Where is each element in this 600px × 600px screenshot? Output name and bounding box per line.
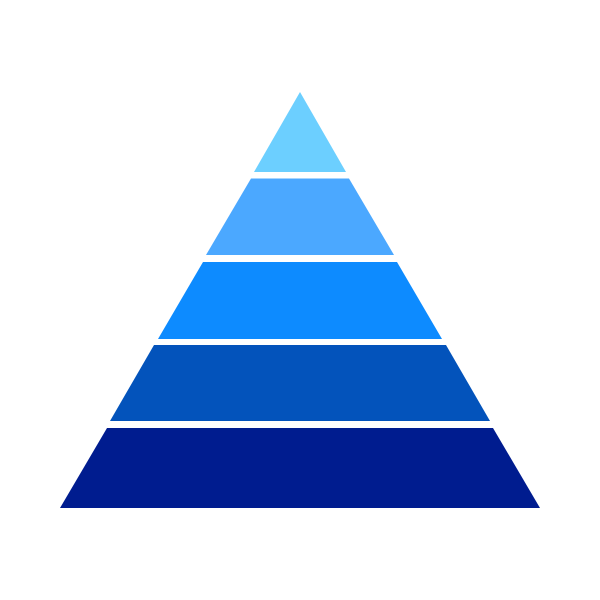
pyramid tier 4: [110, 345, 490, 421]
pyramid tier 1 (top): [254, 92, 346, 172]
pyramid tier 5 (base): [60, 428, 540, 508]
pyramid tier 2: [206, 178, 394, 255]
pyramid tier 3: [158, 262, 442, 339]
